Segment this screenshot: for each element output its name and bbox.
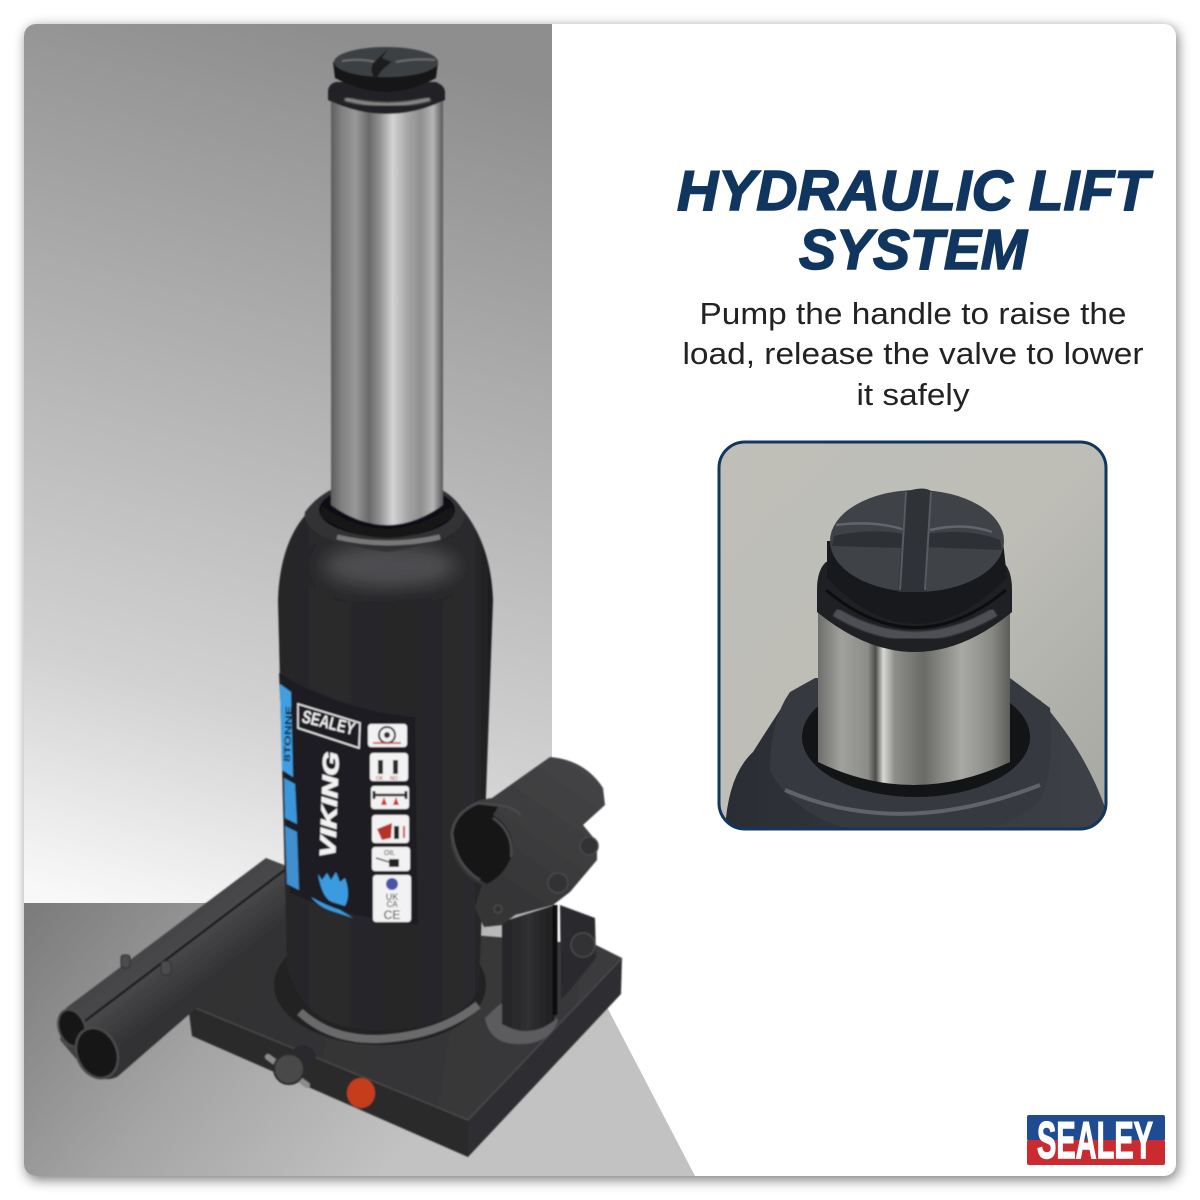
title: SYSTEM [799,218,1028,282]
socket bolts [494,837,598,957]
product label [279,673,418,925]
body text [682,296,1144,412]
safety icons [368,724,411,922]
jack body [278,510,493,1030]
title [677,159,1153,282]
handle tubes [53,858,292,1085]
pump cylinder [485,905,596,1044]
shoulder highlight [324,544,456,588]
icon: oil: OIL [384,850,395,857]
photo background wall [24,24,552,904]
icon: ok no jacks [370,753,408,782]
label SEALEY badge [298,704,360,748]
label SEALEY badge: SEALEY [300,706,357,739]
photo background floor [24,903,695,1176]
inset border [719,442,1106,829]
blue capacity strips [280,684,299,890]
bottle jack [53,47,622,1157]
icon: axle stands [371,786,409,809]
release valve [268,1045,316,1085]
weld ring [274,925,486,1045]
icon: certification marks: UK [386,892,398,902]
handle pins [121,955,171,975]
icon: pumping user [372,815,409,843]
icon: viking ship [311,872,353,918]
collar [304,489,464,552]
icon: oil [372,847,410,871]
red plug [347,1078,375,1108]
VIKING wordmark: VIKING [315,751,344,858]
icon: certification marks [373,875,411,922]
saddle cap [333,47,438,92]
inset shoulder [725,695,1106,830]
icon: certification marks: CA [386,900,398,909]
icon: ok no jacks: OK [376,776,384,782]
body text: Pump the handle to raise the [700,296,1126,331]
body text: load, release the valve to lower [682,336,1144,371]
jack base plate [188,920,622,1157]
body text: it safely [856,377,970,412]
inset photo [719,442,1106,838]
ram top ring [328,82,445,114]
title: HYDRAULIC LIFT [677,159,1153,223]
handle socket [450,757,605,957]
inset ring [817,562,1012,652]
icon: ok no jacks: NO [390,776,398,782]
chrome ram [331,95,443,525]
inset saddle [827,488,1007,624]
blue capacity strips: 8TONNE [282,706,294,762]
inset collar [770,678,1051,838]
icon: wheel [368,724,407,747]
inset ram [818,600,1010,785]
icon: certification marks: CE [384,908,400,922]
